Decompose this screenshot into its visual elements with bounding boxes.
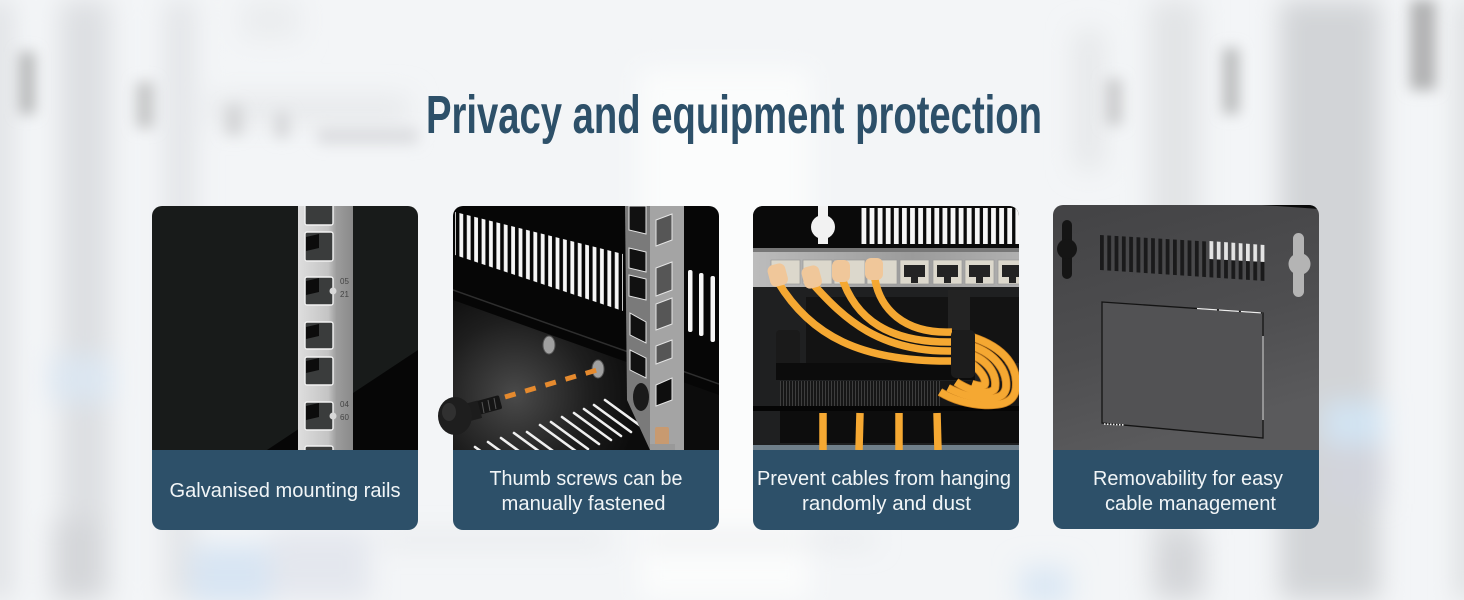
caption <box>757 468 1011 515</box>
panel: cable management <box>753 206 1027 530</box>
panel: thumb screws <box>438 206 719 530</box>
patch panel <box>753 252 1019 287</box>
caption bar <box>453 450 719 530</box>
cable manager <box>806 297 1019 363</box>
panel: galvanised mounting rails <box>152 200 418 530</box>
caption <box>1093 468 1283 515</box>
wall screws <box>543 336 555 354</box>
photo: mounting rail: 05 <box>340 277 349 286</box>
cable clip <box>951 330 975 378</box>
caption: randomly and dust <box>802 493 971 515</box>
brass stud <box>655 427 669 444</box>
caption <box>490 468 682 515</box>
photo: mounting rail: 04 <box>340 400 349 409</box>
caption bar <box>753 450 1019 530</box>
floor slats <box>474 398 640 450</box>
photo: mounting rail: 21 <box>340 290 349 299</box>
photo: mounting rail <box>152 200 418 456</box>
photo: side panel <box>1053 205 1319 450</box>
title: Privacy and equipment protection <box>426 85 1042 145</box>
caption bar <box>1053 450 1319 529</box>
photo: mounting rail: 60 <box>340 413 349 422</box>
caption bar <box>152 450 418 530</box>
ventilation slats <box>455 212 623 311</box>
caption: manually fastened <box>502 493 666 515</box>
caption: Thumb screws can be <box>490 468 682 490</box>
keyhole: right <box>1293 233 1304 297</box>
panel: removable cover <box>1053 205 1319 529</box>
photo: thumb screw and rail <box>453 206 719 474</box>
brush strips <box>780 381 1019 406</box>
orange cables <box>778 273 1016 405</box>
vent slats <box>1100 235 1265 281</box>
rail <box>625 206 650 450</box>
RJ45 plugs <box>766 258 883 290</box>
keyhole: left <box>1062 220 1072 279</box>
caption: Removability for easy <box>1093 468 1283 490</box>
caption: cable management <box>1105 493 1276 515</box>
caption: Galvanised mounting rails <box>170 480 400 502</box>
removable cover outline <box>1102 302 1263 438</box>
dashed orange guide arrow <box>505 370 597 397</box>
photo: patched cables <box>753 206 1027 450</box>
caption: Prevent cables from hanging <box>757 468 1011 490</box>
icon: thumb screw <box>438 395 502 435</box>
